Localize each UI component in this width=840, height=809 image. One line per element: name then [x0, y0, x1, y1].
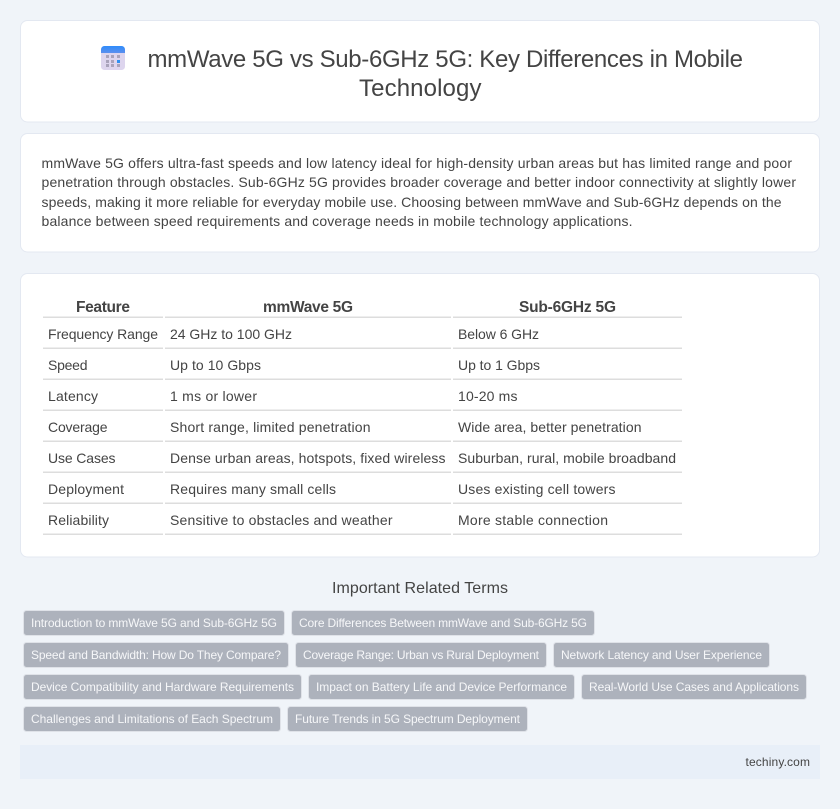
title: mmWave 5G vs Sub-6GHz 5G: Key Differences in Mobile — [148, 46, 743, 73]
title — [148, 46, 743, 102]
row: speed — [48, 357, 540, 373]
row: frequency range — [48, 326, 539, 342]
tag: Speed and Bandwidth: How Do They Compare? — [31, 648, 281, 662]
header panel — [20, 20, 820, 122]
row: latency — [48, 388, 518, 404]
tag: Coverage Range: Urban vs Rural Deployment — [303, 648, 540, 662]
intro paragraph: penetration through obstacles. Sub-6GHz 5G provides broader coverage and better indoor connectivity at slightly lower — [42, 174, 796, 190]
tag: Impact on Battery Life and Device Performance — [316, 680, 567, 694]
row: speed: Speed — [48, 357, 88, 373]
row: latency: 10-20 ms — [458, 388, 518, 404]
row: latency: 1 ms or lower — [170, 388, 257, 404]
row: coverage — [48, 419, 642, 435]
row: deployment: Uses existing cell towers — [458, 481, 616, 497]
tag: Device Compatibility and Hardware Requirements — [31, 680, 294, 694]
row: use cases: Dense urban areas, hotspots, fixed wireless — [170, 450, 446, 466]
row: speed: Up to 10 Gbps — [170, 357, 261, 373]
panel: comparison table — [20, 274, 820, 557]
tag — [554, 642, 770, 668]
row: latency: Latency — [48, 388, 98, 404]
tag — [288, 706, 528, 732]
table header row: mmWave 5G — [263, 299, 353, 316]
tag — [24, 674, 302, 700]
intro paragraph: balance between speed requirements and coverage needs in mobile technology applications. — [42, 213, 632, 229]
row: frequency range: Frequency Range — [48, 326, 158, 342]
tag: Introduction to mmWave 5G and Sub-6GHz 5G — [31, 616, 277, 630]
row: reliability — [48, 512, 608, 528]
row: coverage: Wide area, better penetration — [458, 419, 642, 435]
intro paragraph: mmWave 5G offers ultra-fast speeds and low latency ideal for high-density urban areas but has limited range and poor — [42, 155, 792, 171]
footer — [20, 745, 820, 779]
icon: calendar grid — [101, 46, 125, 70]
tag — [308, 674, 574, 700]
table header row: Feature — [76, 299, 130, 316]
row: use cases — [48, 450, 676, 466]
tag: Future Trends in 5G Spectrum Deployment — [295, 712, 521, 726]
table header row: Sub-6GHz 5G — [519, 299, 616, 316]
intro paragraph — [42, 155, 796, 229]
row: use cases: Use Cases — [48, 450, 116, 466]
tag — [582, 674, 806, 700]
tag — [296, 642, 546, 668]
row: frequency range: 24 GHz to 100 GHz — [170, 326, 292, 342]
tag — [24, 642, 288, 668]
tag: Network Latency and User Experience — [561, 648, 762, 662]
tag — [24, 706, 280, 732]
tag: Challenges and Limitations of Each Spectrum — [31, 712, 273, 726]
tag: Core Differences Between mmWave and Sub-6GHz 5G — [299, 616, 587, 630]
row: reliability: More stable connection — [458, 512, 608, 528]
row: reliability: Sensitive to obstacles and weather — [170, 512, 393, 528]
row: coverage: Short range, limited penetration — [170, 419, 370, 435]
tag — [292, 610, 594, 636]
footer credit: techiny.com — [746, 755, 810, 769]
row: speed: Up to 1 Gbps — [458, 357, 540, 373]
heading: related terms: Important Related Terms — [332, 580, 508, 597]
title: Technology — [359, 75, 482, 102]
tag — [24, 610, 284, 636]
related term tags — [24, 610, 806, 732]
intro paragraph: speeds, making it more reliable for everyday mobile use. Choosing between mmWave and Sub-6GHz depends on the — [42, 194, 782, 210]
table header row — [76, 299, 616, 316]
row: reliability: Reliability — [48, 512, 109, 528]
row: deployment: Requires many small cells — [170, 481, 336, 497]
tag: Real-World Use Cases and Applications — [589, 680, 799, 694]
row: use cases: Suburban, rural, mobile broadband — [458, 450, 676, 466]
row: frequency range: Below 6 GHz — [458, 326, 539, 342]
row: deployment: Deployment — [48, 481, 124, 497]
row: coverage: Coverage — [48, 419, 108, 435]
panel: intro text — [20, 134, 820, 252]
row: deployment — [48, 481, 616, 497]
